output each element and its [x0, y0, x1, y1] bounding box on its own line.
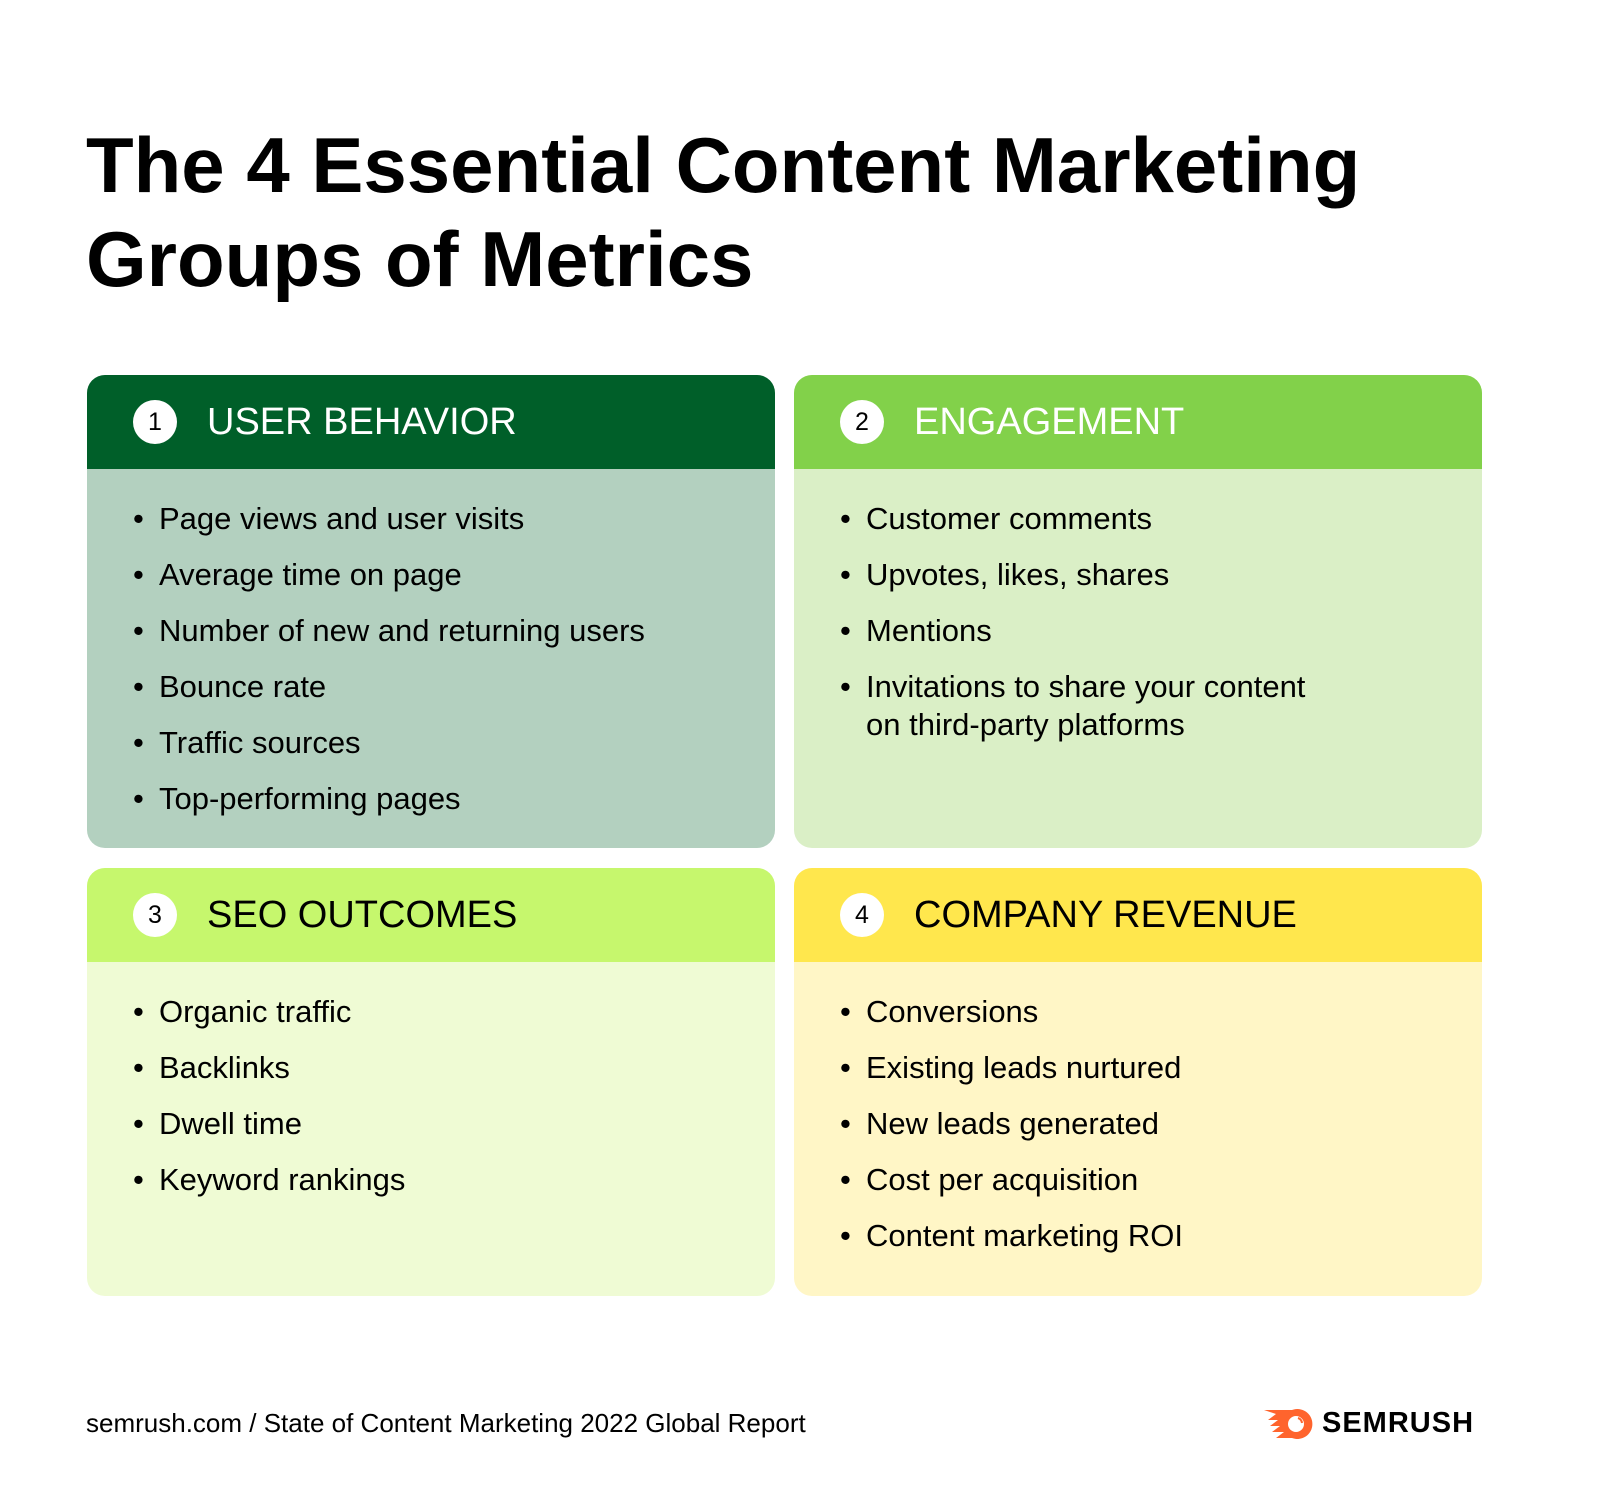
logo: semrush: SEMRUSH [1322, 1406, 1474, 1438]
list: user behavior [134, 501, 645, 816]
list: user behavior: Average time on page [159, 557, 462, 592]
list: company revenue: New leads generated [866, 1106, 1159, 1141]
list: engagement: Customer comments [866, 501, 1152, 536]
header: seo outcomes [87, 868, 775, 962]
header: engagement: 2 [855, 408, 869, 436]
list: company revenue: Existing leads nurtured [866, 1050, 1181, 1085]
header: company revenue: 4 [855, 900, 869, 928]
list: engagement: Mentions [866, 613, 992, 648]
header: seo outcomes: SEO OUTCOMES [207, 894, 517, 936]
footer source: semrush.com / State of Content Marketing 2022 Global Report [86, 1408, 806, 1438]
list: company revenue: Cost per acquisition [866, 1162, 1138, 1197]
list: seo outcomes: Keyword rankings [159, 1162, 405, 1197]
header: user behavior: 1 [148, 408, 162, 436]
list: company revenue: Content marketing ROI [866, 1218, 1183, 1253]
panel: seo outcomes [87, 868, 775, 1296]
title: The 4 Essential Content Marketing [86, 121, 1360, 209]
header: engagement [794, 375, 1482, 469]
list: seo outcomes [134, 994, 405, 1197]
list: company revenue: Conversions [866, 994, 1038, 1029]
title [86, 121, 1360, 303]
list: seo outcomes: Backlinks [159, 1050, 290, 1085]
panel: company revenue [794, 868, 1482, 1296]
list: engagement: Upvotes, likes, shares [866, 557, 1169, 592]
header: company revenue: COMPANY REVENUE [914, 894, 1297, 936]
list: user behavior: Number of new and returning users [159, 613, 645, 648]
list: user behavior: Bounce rate [159, 669, 326, 704]
title: Groups of Metrics [86, 215, 753, 303]
header: seo outcomes: 3 [148, 900, 162, 928]
list: company revenue [841, 994, 1183, 1253]
panel: user behavior [87, 375, 775, 848]
list: user behavior: Traffic sources [159, 725, 361, 760]
list: engagement: on third-party platforms [866, 707, 1185, 742]
list: user behavior: Page views and user visits [159, 501, 524, 536]
list: seo outcomes: Organic traffic [159, 994, 351, 1029]
header: engagement: ENGAGEMENT [914, 400, 1184, 442]
panel: engagement [794, 375, 1482, 848]
list: user behavior: Top-performing pages [159, 781, 461, 816]
header: user behavior: USER BEHAVIOR [207, 400, 517, 442]
list: engagement: Invitations to share your content [866, 669, 1305, 704]
header: company revenue [794, 868, 1482, 962]
list: engagement [841, 501, 1306, 742]
list: seo outcomes: Dwell time [159, 1106, 302, 1141]
header: user behavior [87, 375, 775, 469]
